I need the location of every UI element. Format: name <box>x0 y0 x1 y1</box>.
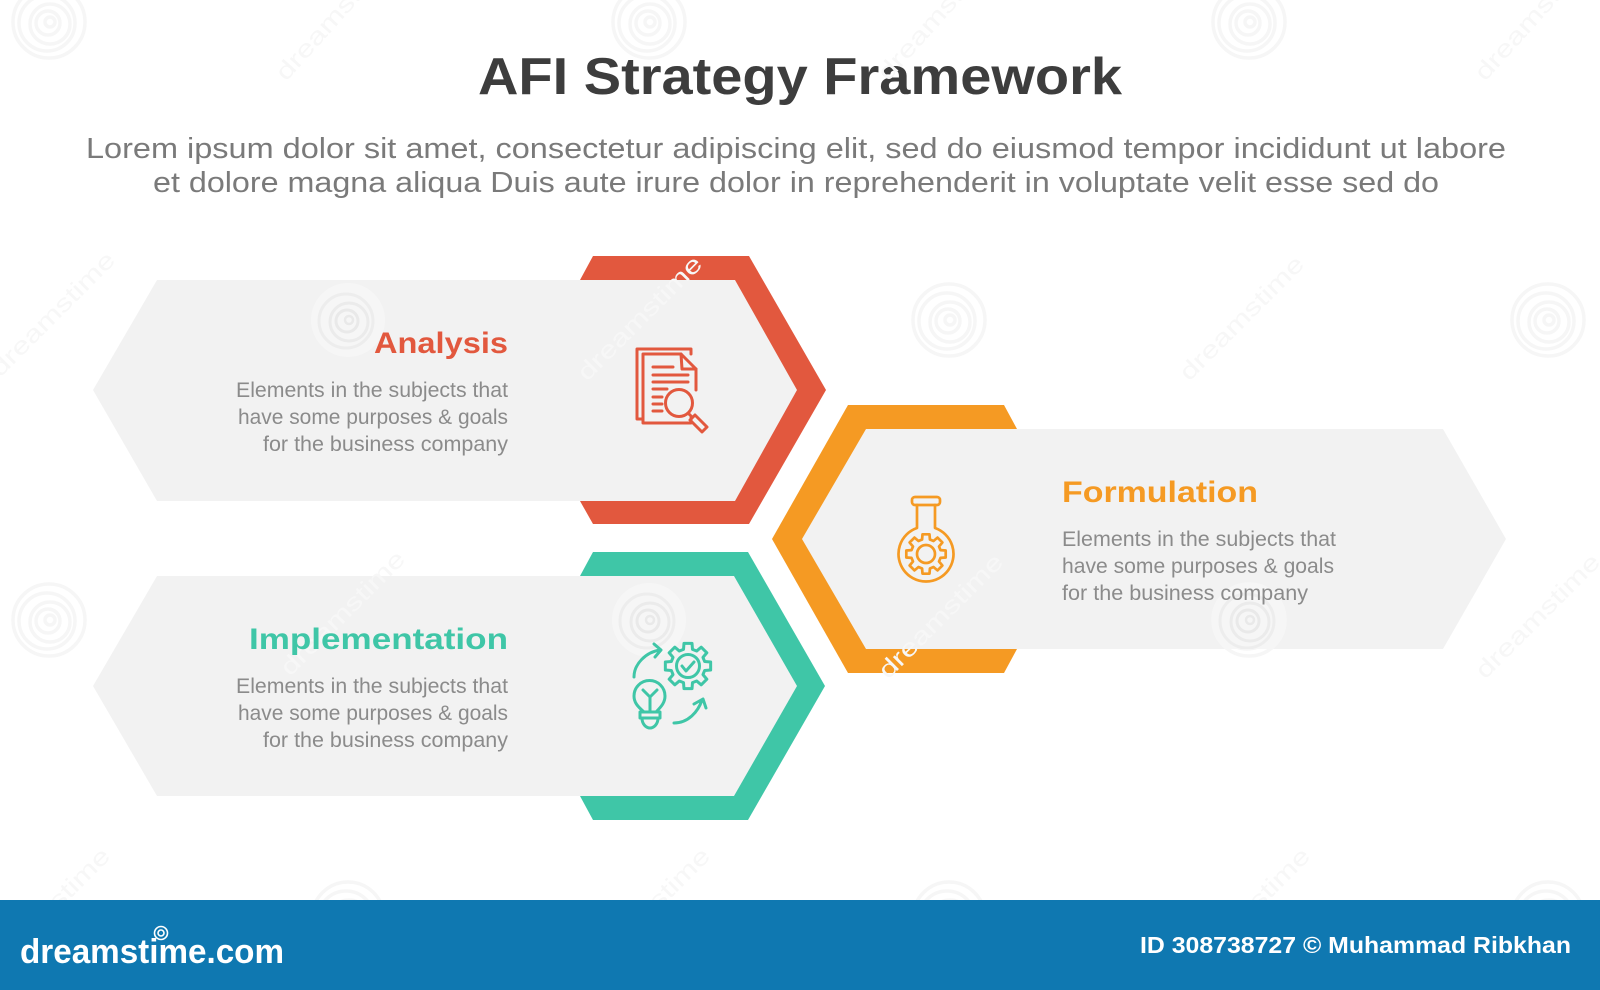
analysis grey hexagon <box>93 280 797 501</box>
title: AFI Strategy Framework <box>478 48 1122 106</box>
analysis description: have some purposes & goals <box>238 406 508 429</box>
subtitle text <box>86 133 1506 199</box>
analysis description <box>236 379 509 456</box>
infographic canvas: dreamstime <box>275 545 411 681</box>
infographic canvas: dreamstime <box>1174 250 1310 386</box>
infographic canvas: dreamstime <box>1180 842 1316 978</box>
panel: analysis <box>93 256 826 524</box>
formulation text block <box>1062 476 1336 605</box>
implementation heading: Implementation <box>249 623 508 656</box>
formulation heading: Formulation <box>1062 476 1258 509</box>
footer logo: dreamstime.com <box>20 933 284 971</box>
implementation teal hexagon ring <box>580 552 825 820</box>
subtitle text: et dolore magna aliqua Duis aute irure dolor in reprehenderit in voluptate velit esse sed do <box>153 167 1439 199</box>
infographic canvas: dreamstime <box>580 842 716 978</box>
icon: flask with gear <box>899 497 954 581</box>
formulation grey hexagon <box>802 429 1506 649</box>
infographic canvas: dreamstime <box>873 548 1009 684</box>
implementation grey hexagon <box>93 576 797 796</box>
analysis text block <box>236 327 509 456</box>
subtitle text: Lorem ipsum dolor sit amet, consectetur adipiscing elit, sed do eiusmod tempor incididunt ut labore <box>86 133 1506 165</box>
panel: implementation <box>93 552 825 820</box>
infographic canvas: dreamstime <box>1470 548 1600 684</box>
icon: document with magnifier <box>637 349 707 432</box>
footer credit: ID 308738727 © Muhammad Ribkhan <box>1140 932 1571 958</box>
logo spiral <box>154 926 168 940</box>
implementation description: have some purposes & goals <box>238 702 508 725</box>
formulation orange hexagon ring <box>772 405 1017 673</box>
formulation description: Elements in the subjects that <box>1062 528 1336 551</box>
footer bar <box>0 900 1600 990</box>
implementation description: for the business company <box>263 729 509 752</box>
analysis red hexagon ring <box>580 256 826 524</box>
panel: formulation <box>772 405 1506 673</box>
implementation description <box>236 675 509 752</box>
formulation description: for the business company <box>1062 582 1309 605</box>
implementation text block <box>236 623 509 752</box>
icon: bulb, gear and cycle arrows <box>634 643 711 728</box>
analysis description: for the business company <box>263 433 509 456</box>
formulation description: have some purposes & goals <box>1062 555 1334 578</box>
implementation description: Elements in the subjects that <box>236 675 508 698</box>
analysis description: Elements in the subjects that <box>236 379 508 402</box>
infographic canvas: dreamstime <box>572 250 708 386</box>
analysis heading: Analysis <box>374 327 508 360</box>
formulation description <box>1062 528 1336 605</box>
